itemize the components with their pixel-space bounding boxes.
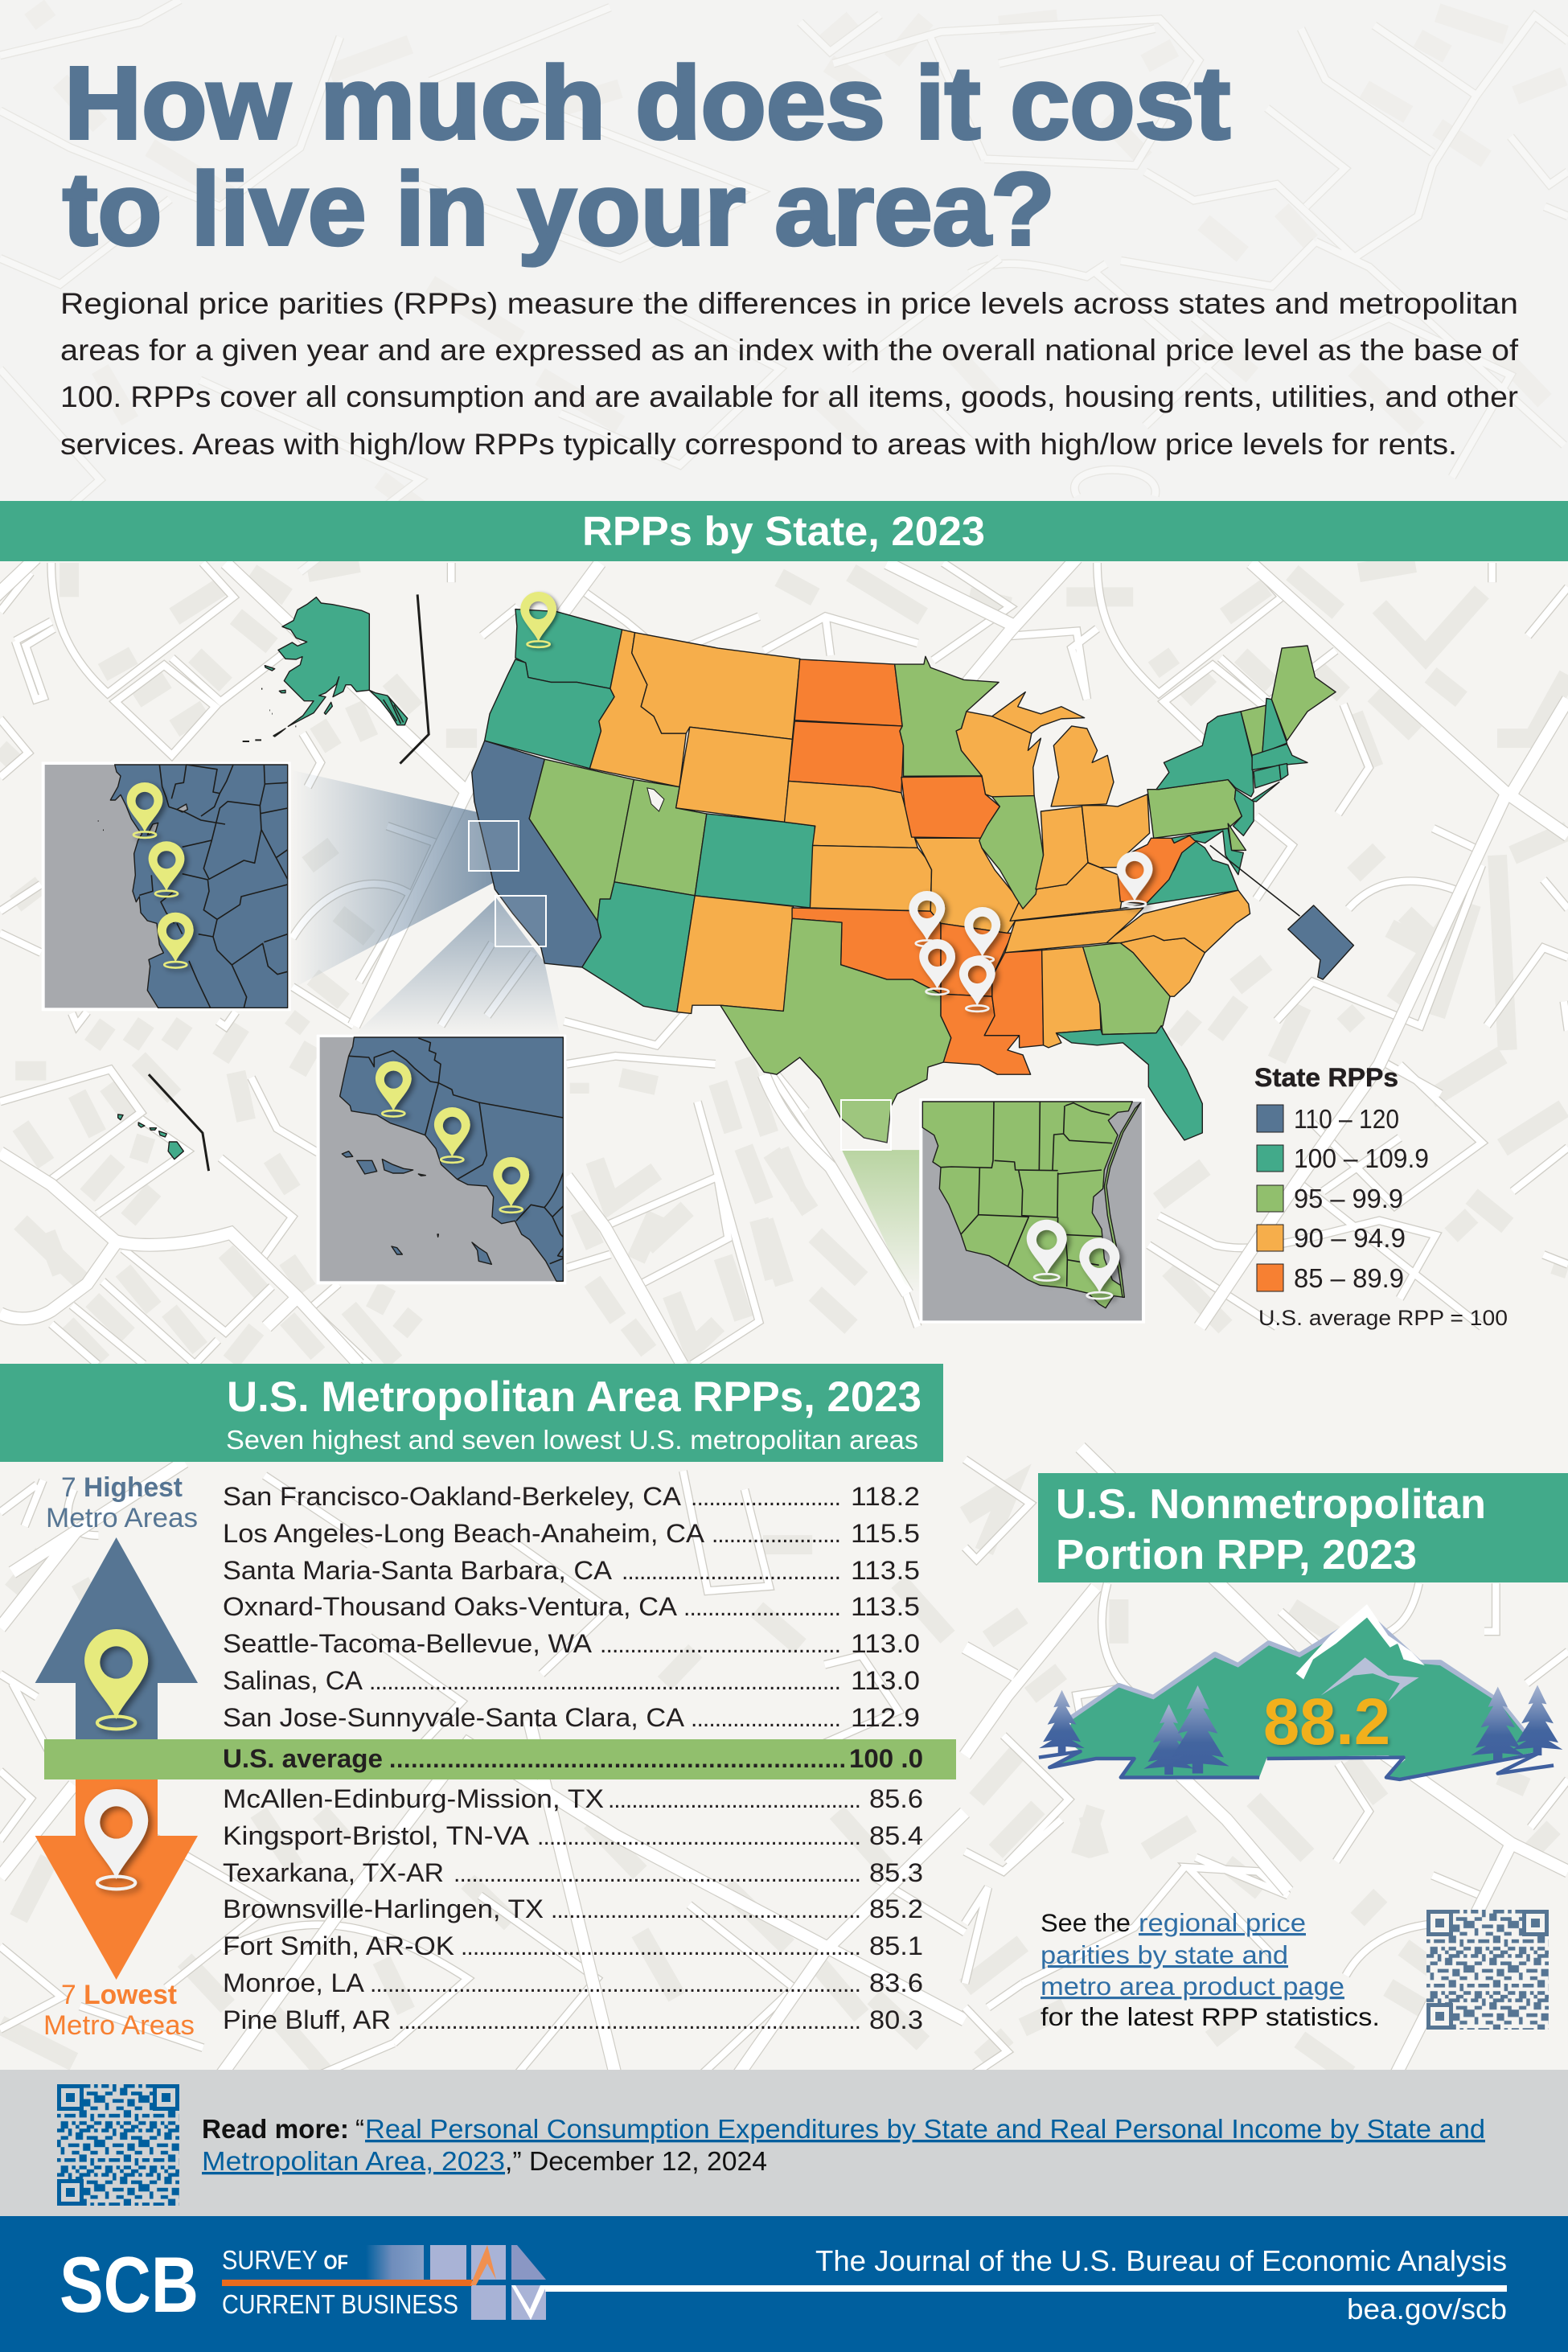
pins: lowest-RPP metro areas	[909, 852, 1152, 1012]
legend: State RPPs: 110 – 120	[1294, 1104, 1399, 1134]
map: contiguous U.S. states by RPP	[472, 610, 1336, 1143]
section heading: U.S. Metropolitan Area RPPs: U.S. Metropolitan Area RPPs, 2023	[227, 1373, 922, 1421]
table: seven lowest metro areas: ...................................................................	[461, 1934, 861, 1960]
table: seven lowest metro areas	[223, 1784, 923, 2034]
mountain illustration with 88.2 value	[1039, 1604, 1562, 1779]
Iowa	[901, 776, 999, 838]
table: seven lowest metro areas: 85.2	[869, 1894, 923, 1923]
SCB logo	[60, 2240, 1507, 2329]
table: seven lowest metro areas: ...................................................................................	[370, 1971, 861, 1997]
Georgia	[1083, 943, 1170, 1034]
table: seven highest metro areas: 115.5	[851, 1519, 920, 1548]
section band: RPPs by State: RPPs by State, 2023	[582, 508, 985, 554]
Connecticut	[1254, 765, 1281, 788]
Arkansas	[941, 923, 1012, 996]
Santa Maria, Oxnard and Los Angeles pins	[376, 1061, 529, 1213]
QR code: product page	[1426, 1910, 1549, 2030]
table: seven highest metro areas: .........................	[691, 1706, 841, 1732]
Montana	[632, 633, 800, 739]
up arrow with pin	[35, 1537, 198, 1739]
Arizona	[582, 882, 695, 1012]
section heading: U.S. Nonmetropolitan Portion RPP: Portion RPP, 2023	[1056, 1532, 1417, 1578]
Missouri	[915, 838, 1020, 933]
inset: Southern California	[317, 1035, 566, 1284]
text block: see the product page: metro area product page	[1041, 1972, 1344, 2001]
table: seven highest metro areas: Santa Maria-Santa Barbara, CA	[223, 1556, 612, 1585]
down arrow with pin	[35, 1779, 198, 1980]
table: seven highest metro areas: .....................................	[622, 1558, 841, 1585]
McAllen and Brownsville pins	[1027, 1220, 1119, 1299]
pin: Seattle	[520, 592, 556, 647]
table: seven lowest metro areas: Kingsport-Bristol, TN-VA	[223, 1821, 529, 1850]
table: seven lowest metro areas: Brownsville-Harlingen, TX	[223, 1894, 544, 1923]
Washington	[515, 610, 622, 688]
table: seven lowest metro areas: 85.6	[869, 1784, 923, 1813]
Utah	[614, 780, 707, 896]
North Dakota	[794, 659, 902, 726]
Pennsylvania	[1147, 780, 1242, 838]
label: 7 Lowest Metro Areas: Metro Areas	[43, 2010, 195, 2041]
table: seven highest metro areas: .........................	[691, 1484, 841, 1511]
read more band: Metropolitan Area, 2023	[202, 2146, 505, 2176]
Rhode Island	[1279, 764, 1288, 780]
Maryland	[1172, 828, 1243, 875]
read more band: ,” December 12, 2024	[505, 2146, 767, 2176]
text block: see the product page: for the latest RPP statistics.	[1041, 2002, 1380, 2031]
table: seven lowest metro areas: 83.6	[869, 1968, 923, 1997]
legend: State RPPs: U.S. average RPP = 100	[1258, 1306, 1508, 1330]
label: 7 Highest Metro Areas: 7 Highest	[61, 1472, 183, 1503]
Kentucky	[1010, 863, 1123, 921]
intro paragraph	[60, 286, 1519, 461]
table: seven lowest metro areas: Monroe, LA	[223, 1968, 364, 1997]
table: seven highest metro areas: ........................................	[600, 1632, 841, 1658]
Nevada	[529, 759, 634, 921]
footer band	[0, 2216, 1568, 2352]
text block: see the product page: See the	[1041, 1908, 1131, 1937]
intro paragraph: services. Areas with high/low RPPs typically correspond to areas with high/low price levels for rents.	[60, 427, 1457, 461]
intro paragraph: Regional price parities (RPPs) measure the differences in price levels across states and metropolitan	[60, 286, 1518, 320]
Great Salt Lake	[647, 788, 664, 811]
text block: see the product page	[1041, 1908, 1380, 2031]
Idaho	[589, 630, 686, 787]
Colorado	[695, 814, 815, 908]
South Carolina	[1120, 935, 1205, 996]
Minnesota	[895, 656, 999, 776]
Kansas	[810, 845, 932, 911]
section heading: U.S. Nonmetropolitan Portion RPP	[1038, 1473, 1568, 1582]
table: seven highest metro areas: ..........................	[683, 1595, 841, 1621]
title: How much does it cost	[64, 46, 1230, 161]
Michigan	[1051, 726, 1114, 807]
footer band: The Journal of the U.S. Bureau of Economic Analysis	[815, 2244, 1507, 2277]
table: seven highest metro areas: 113.0	[851, 1629, 920, 1658]
U.S. average bar: ...............................................................	[389, 1747, 846, 1773]
legend: State RPPs: 85 – 89.9	[1294, 1263, 1404, 1293]
table: seven highest metro areas: Los Angeles-Long Beach-Anaheim, CA	[223, 1519, 704, 1548]
read more band: Read more:	[202, 2114, 349, 2144]
table: seven highest metro areas	[223, 1482, 920, 1732]
section band: RPPs by State	[0, 501, 1568, 561]
West Virginia	[1118, 835, 1197, 904]
table: seven highest metro areas: 113.5	[851, 1592, 920, 1621]
callout wedges to insets	[291, 770, 919, 1294]
Texas	[720, 918, 951, 1143]
text block: see the product page: parities by state and	[1041, 1940, 1288, 1969]
Massachusetts	[1252, 744, 1307, 770]
table: seven lowest metro areas: ..............................................................................	[398, 2008, 861, 2034]
legend: State RPPs: State RPPs	[1254, 1063, 1398, 1092]
label: 7 Lowest Metro Areas: 7 Lowest	[61, 1980, 177, 2010]
Michigan upper peninsula	[992, 692, 1085, 733]
Louisiana	[941, 994, 1031, 1074]
table: seven lowest metro areas: ...........................................	[608, 1787, 861, 1813]
Illinois	[979, 795, 1044, 909]
table: seven highest metro areas: Oxnard-Thousand Oaks-Ventura, CA	[223, 1592, 677, 1621]
table: seven lowest metro areas: ....................................................................	[454, 1861, 861, 1887]
table: seven lowest metro areas: 85.1	[869, 1931, 923, 1960]
map: Hawaii	[118, 1114, 183, 1160]
table: seven highest metro areas: ...............................................................................	[369, 1669, 841, 1695]
Mississippi	[984, 950, 1044, 1048]
map: Washington DC callout	[1210, 845, 1353, 979]
title	[63, 46, 1230, 267]
QR code: read more	[57, 2084, 179, 2206]
Maine	[1271, 646, 1336, 741]
New York	[1156, 712, 1254, 797]
table: seven highest metro areas: San Francisco-Oakland-Berkeley, CA	[223, 1482, 681, 1511]
Florida	[1057, 1026, 1202, 1140]
legend: State RPPs: 90 – 94.9	[1294, 1223, 1406, 1253]
SCB logo: SURVEY OF	[222, 2245, 348, 2275]
Alaska and Hawaii boundary lines	[149, 594, 429, 1171]
Vermont	[1241, 705, 1266, 755]
read more band	[0, 2070, 1568, 2216]
Nebraska	[785, 781, 917, 848]
SCB logo: SCB	[60, 2240, 199, 2329]
table: seven lowest metro areas: 85.4	[869, 1821, 923, 1850]
table: seven lowest metro areas: Texarkana, TX-AR	[223, 1858, 444, 1887]
inset: Northern California	[42, 761, 291, 1011]
Ohio	[1082, 794, 1150, 868]
inset locator boxes	[469, 821, 891, 1150]
Wisconsin	[956, 712, 1041, 797]
table: seven lowest metro areas: 85.3	[869, 1858, 923, 1887]
label: 7 Highest Metro Areas	[46, 1472, 198, 1533]
table: seven highest metro areas: ......................	[712, 1521, 841, 1548]
Wyoming	[676, 727, 792, 822]
Long Island	[1251, 782, 1279, 802]
map: Alaska	[243, 597, 408, 741]
New Jersey	[1233, 790, 1254, 835]
inset: South Texas	[919, 1098, 1145, 1324]
Virginia	[1120, 840, 1238, 909]
legend: State RPPs: 100 – 109.9	[1294, 1143, 1429, 1173]
Indiana	[1036, 807, 1088, 889]
label: 7 Lowest Metro Areas	[43, 1980, 195, 2041]
Tennessee	[1005, 908, 1143, 953]
read more band: Real Personal Consumption Expenditures by State and Real Personal Income by State and	[365, 2114, 1485, 2144]
California	[472, 741, 601, 967]
table: seven highest metro areas: 113.0	[851, 1666, 920, 1695]
text block: see the product page: regional price	[1139, 1908, 1306, 1937]
SCB logo: CURRENT BUSINESS	[222, 2289, 458, 2319]
Oklahoma	[792, 908, 941, 994]
footer band: bea.gov/scb	[1347, 2292, 1507, 2325]
legend: State RPPs: 95 – 99.9	[1294, 1184, 1403, 1213]
table: seven lowest metro areas: Fort Smith, AR-OK	[223, 1931, 454, 1960]
U.S. average bar: 100 .0	[849, 1744, 923, 1773]
title: to live in your area?	[63, 152, 1055, 267]
section heading: U.S. Metropolitan Area RPPs	[0, 1364, 943, 1462]
legend: State RPPs	[1254, 1063, 1508, 1330]
intro paragraph: 100. RPPs cover all consumption and are available for all items, goods, housing rents, utilities, and other	[60, 380, 1518, 413]
North Carolina	[1105, 890, 1250, 953]
label: 7 Highest Metro Areas: Metro Areas	[46, 1503, 198, 1533]
table: seven highest metro areas: 113.5	[851, 1556, 920, 1585]
Alabama	[1042, 946, 1101, 1048]
table: seven lowest metro areas: 80.3	[869, 2005, 923, 2034]
table: seven highest metro areas: Seattle-Tacoma-Bellevue, WA	[223, 1629, 592, 1658]
San Francisco, San Jose and Salinas pins	[127, 782, 194, 968]
South Dakota	[789, 721, 903, 793]
read more band: “	[355, 2114, 364, 2144]
U.S. average bar	[44, 1739, 956, 1779]
table: seven lowest metro areas: McAllen-Edinburg-Mission, TX	[223, 1784, 604, 1813]
section heading: U.S. Metropolitan Area RPPs: Seven highest and seven lowest U.S. metropolitan areas	[226, 1425, 918, 1455]
table: seven lowest metro areas: ....................................................	[551, 1897, 861, 1923]
New Mexico	[677, 896, 794, 1013]
table: seven highest metro areas: San Jose-Sunnyvale-Santa Clara, CA	[223, 1703, 684, 1732]
table: seven highest metro areas: 112.9	[851, 1703, 920, 1732]
New Hampshire	[1262, 698, 1287, 753]
U.S. average bar: U.S. average	[223, 1744, 383, 1773]
Delaware	[1228, 823, 1246, 850]
mountain illustration with 88.2 value: 88.2	[1263, 1685, 1390, 1759]
Oregon	[485, 659, 614, 769]
intro paragraph: areas for a given year and are expressed as an index with the overall national price level as the base of	[60, 333, 1519, 367]
table: seven lowest metro areas: ......................................................	[537, 1824, 861, 1850]
section heading: U.S. Nonmetropolitan Portion RPP: U.S. Nonmetropolitan	[1056, 1481, 1486, 1528]
table: seven highest metro areas: 118.2	[851, 1482, 920, 1511]
table: seven highest metro areas: Salinas, CA	[223, 1666, 363, 1695]
table: seven lowest metro areas: Pine Bluff, AR	[223, 2005, 391, 2034]
